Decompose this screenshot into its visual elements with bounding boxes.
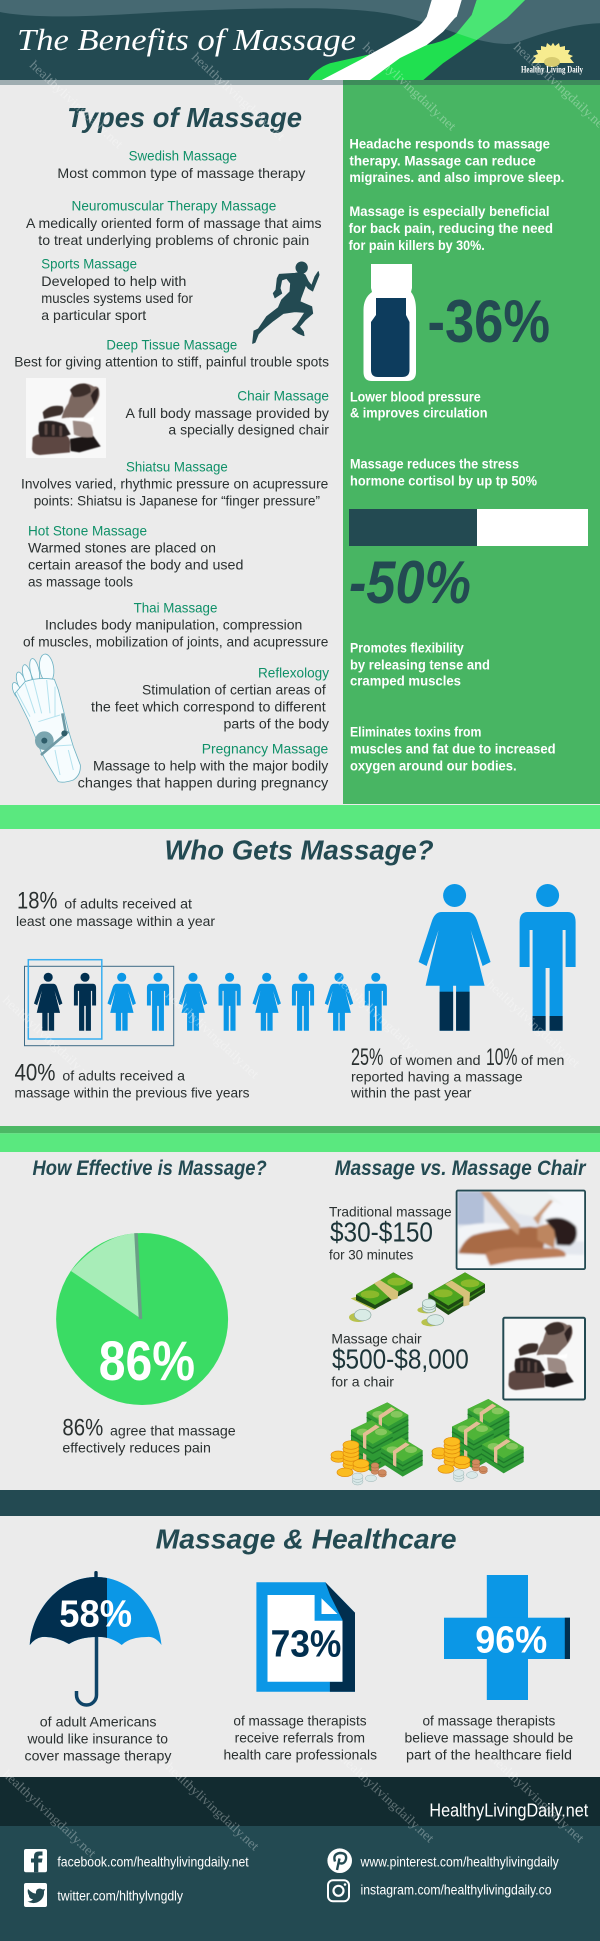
text: 40 percent: massage within the previous five years: [14, 1085, 250, 1101]
item: chair: a specially designed chair: [168, 422, 329, 438]
text: healthylivingdaily.net: [163, 987, 263, 1082]
text: 25 and 10 percent: reported having a massage: [351, 1069, 523, 1085]
item: chair: Chair Massage: [237, 388, 329, 404]
header banner: [0, 0, 600, 85]
text: 18 percent: of adults received at: [64, 896, 192, 912]
social: instagram: instagram.com/healthylivingdaily.co: [360, 1883, 552, 1898]
text: healthylivingdaily.net: [484, 976, 584, 1071]
text: toxins: muscles and fat due to increased: [350, 741, 556, 757]
item: hot stone: Warmed stones are placed on: [28, 540, 216, 556]
panel: benefits (green): [343, 85, 600, 804]
text: chair price: for a chair: [331, 1374, 394, 1390]
item: shiatsu: [21, 459, 329, 509]
icon: runner: [253, 262, 319, 343]
item: reflexology: parts of the body: [224, 716, 329, 732]
text: healthylivingdaily.net: [333, 972, 433, 1067]
text: back pain: Massage is especially beneficial: [349, 203, 550, 219]
panel: who gets massage: [14, 834, 576, 1101]
item: deep tissue: Deep Tissue Massage: [106, 337, 237, 353]
item: neuromuscular: to treat underlying problems of chronic pain: [38, 232, 309, 248]
text: back pain: [349, 203, 553, 253]
item: pregnancy: changes that happen during pregnancy: [78, 775, 328, 791]
text: traditional price: Traditional massage: [329, 1204, 452, 1220]
item: thai: Includes body manipulation, compression: [45, 617, 302, 633]
text: 73 caption: health care professionals: [224, 1747, 377, 1763]
text: 86 percent: [62, 1415, 236, 1456]
social: instagram: [328, 1880, 552, 1901]
icon: medical cross 96 percent: [444, 1575, 570, 1700]
text: flexibility: [350, 640, 490, 689]
item: swedish: Most common type of massage therapy: [57, 165, 305, 181]
stat: 96%: 96%: [475, 1619, 547, 1661]
social: pinterest: www.pinterest.com/healthylivingdaily: [360, 1855, 559, 1870]
image: massage photo: [457, 1191, 585, 1269]
text: toxins: [350, 724, 556, 774]
stat: 58%: 58%: [59, 1594, 132, 1636]
text: healthylivingdaily.net: [360, 39, 460, 134]
item: sports: muscles systems used for: [41, 290, 193, 306]
divider band: [0, 805, 600, 829]
icon: umbrella 58 percent: [30, 1571, 161, 1705]
text: back pain: for pain killers by 30%.: [349, 237, 485, 253]
item: reflexology: the feet which correspond to different: [91, 699, 326, 715]
stat: -50%: -50%: [349, 549, 471, 616]
heading: massage and healthcare: Massage & Healthcare: [156, 1524, 456, 1555]
panel: massage vs chair: [329, 1157, 587, 1485]
text: flexibility: cramped muscles: [350, 673, 461, 689]
pictogram row: ten people: [24, 960, 387, 1046]
text: 73 caption: receive referrals from: [235, 1730, 365, 1746]
social: twitter: [24, 1883, 183, 1907]
text: 86 percent: agree that massage: [110, 1423, 236, 1439]
stat: 73%: 73%: [271, 1624, 341, 1666]
text: headache: therapy. Massage can reduce: [349, 153, 536, 169]
panel: types of massage: [10, 102, 329, 791]
text: chair price: Massage chair: [331, 1331, 422, 1347]
item: hot stone: certain areasof the body and used: [28, 557, 243, 573]
text: 25 and 10 percent: of men: [521, 1052, 564, 1068]
text: 40 percent: 40%: [14, 1060, 56, 1087]
text: 25 and 10 percent: 10%: [486, 1044, 517, 1071]
text: 40 percent: [14, 1060, 250, 1101]
image: chair framed: [503, 1318, 585, 1400]
item: chair: [126, 388, 329, 438]
bar: 50 percent: [349, 509, 588, 546]
text: cortisol: Massage reduces the stress: [350, 456, 519, 472]
item: hot stone: as massage tools: [28, 574, 133, 590]
text: chair price: [331, 1331, 469, 1390]
item: sports: a particular sport: [41, 307, 146, 323]
item: reflexology: Stimulation of certian areas of: [142, 682, 326, 698]
text: traditional price: for 30 minutes: [329, 1246, 413, 1262]
item: thai: Thai Massage: [134, 600, 218, 616]
item: deep tissue: [14, 337, 329, 370]
text: 25 and 10 percent: within the past year: [350, 1085, 472, 1101]
item: neuromuscular: Neuromuscular Therapy Massage: [72, 198, 276, 214]
text: 25 and 10 percent: [350, 1044, 564, 1101]
item: thai: of muscles, mobilization of joints, and acupressure: [23, 634, 329, 650]
item: sports: [41, 256, 193, 323]
social: facebook: [24, 1849, 249, 1872]
text: headache: [349, 136, 564, 185]
text: traditional price: $30-$150: [330, 1217, 433, 1248]
item: shiatsu: Shiatsu Massage: [126, 459, 228, 475]
heading: how effective: How Effective is Massage?: [32, 1157, 267, 1180]
icon: document 73 percent: [256, 1582, 355, 1692]
icon: large money piles: [331, 1399, 524, 1485]
text: 96 caption: believe massage should be: [404, 1730, 574, 1746]
text: cortisol: hormone cortisol by up tp 50%: [350, 473, 537, 489]
text: 73 caption: [224, 1713, 377, 1763]
panel: how effective: [32, 1157, 267, 1456]
item: hot stone: [28, 523, 243, 590]
stat: 86%: 86%: [99, 1329, 195, 1392]
text: 58 caption: would like insurance to: [27, 1730, 168, 1746]
pie chart: [56, 1233, 228, 1405]
item: swedish: Swedish Massage: [129, 148, 237, 164]
text: 96 caption: of massage therapists: [422, 1713, 555, 1729]
text: healthylivingdaily.net: [338, 1751, 438, 1846]
item: reflexology: Reflexology: [258, 665, 329, 681]
text: back pain: for back pain, reducing the need: [349, 220, 553, 236]
text: healthylivingdaily.net: [163, 1759, 263, 1854]
title: The Benefits of Massage: [17, 22, 356, 57]
text: 40 percent: of adults received a: [62, 1068, 185, 1084]
icon: large woman: [419, 884, 491, 1031]
item: shiatsu: Involves varied, rhythmic pressure on acupressure: [21, 475, 329, 491]
item: swedish: [57, 148, 305, 181]
item: hot stone: Hot Stone Massage: [28, 523, 147, 539]
icon: small money stacks: [349, 1272, 485, 1326]
text: 25 and 10 percent: of women and: [390, 1052, 481, 1068]
text: 18 percent: [16, 888, 215, 929]
text: 86 percent: effectively reduces pain: [62, 1440, 211, 1456]
text: healthylivingdaily.net: [0, 1766, 100, 1861]
text: flexibility: Promotes flexibility: [350, 640, 464, 656]
social: twitter: twitter.com/hlthylvngdly: [57, 1889, 183, 1904]
text: 73 caption: of massage therapists: [233, 1713, 367, 1729]
text: 86 percent: 86%: [62, 1415, 103, 1442]
text: blood pressure: [350, 389, 488, 421]
item: shiatsu: points: Shiatsu is Japanese for “finger pressure”: [34, 493, 320, 509]
text: 96 caption: [404, 1713, 574, 1763]
social: facebook: facebook.com/healthylivingdaily.net: [57, 1855, 249, 1870]
text: 18 percent: least one massage within a year: [16, 913, 215, 929]
text: 96 caption: part of the healthcare field: [406, 1747, 572, 1763]
heading: types of massage: Types of Massage: [67, 102, 302, 133]
text: healthylivingdaily.net: [0, 992, 100, 1087]
item: neuromuscular: [26, 198, 322, 248]
text: traditional price: [329, 1204, 452, 1262]
item: neuromuscular: A medically oriented form of massage that aims: [26, 215, 322, 231]
text: flexibility: by releasing tense and: [350, 657, 490, 673]
footer: [0, 1777, 600, 1941]
text: headache: Headache responds to massage: [349, 136, 550, 152]
text: 18 percent: 18%: [17, 888, 57, 915]
item: sports: Sports Massage: [41, 256, 137, 272]
text: 58 caption: cover massage therapy: [24, 1747, 171, 1763]
divider band: [0, 1126, 600, 1152]
text: healthylivingdaily.net: [189, 49, 289, 144]
logo: [521, 43, 583, 76]
item: pregnancy: Pregnancy Massage: [202, 741, 328, 757]
item: pregnancy: Massage to help with the major bodily: [93, 758, 328, 774]
text: 25 and 10 percent: 25%: [351, 1044, 383, 1071]
icon: large man: [520, 884, 576, 1031]
text: blood pressure: Lower blood pressure: [350, 389, 481, 405]
heading: who gets massage: Who Gets Massage?: [164, 834, 434, 865]
text: toxins: oxygen around our bodies.: [350, 758, 517, 774]
divider band: [0, 1490, 600, 1516]
image: massage chair: [26, 378, 106, 458]
text: chair price: $500-$8,000: [332, 1343, 469, 1374]
text: blood pressure: & improves circulation: [350, 405, 488, 421]
text: healthylivingdaily.net: [488, 1751, 588, 1846]
text: 58 caption: [24, 1713, 171, 1763]
item: reflexology: [91, 665, 329, 732]
text: cortisol: [350, 456, 537, 489]
text: 58 caption: of adult Americans: [40, 1713, 156, 1729]
text: headache: migraines. and also improve sleep.: [349, 169, 564, 185]
stat: -36%: -36%: [428, 288, 550, 355]
item: pregnancy: [78, 741, 328, 791]
item: chair: A full body massage provided by: [126, 405, 329, 421]
panel: massage and healthcare: [24, 1524, 574, 1763]
item: thai: [23, 600, 329, 650]
item: deep tissue: Best for giving attention to stiff, painful trouble spots: [14, 354, 329, 370]
icon: pill bottle: [364, 264, 416, 381]
text: healthylivingdaily.net: [27, 57, 127, 152]
icon: foot reflexology: [10, 653, 80, 782]
item: sports: Developed to help with: [41, 273, 186, 289]
social: pinterest: [327, 1848, 559, 1873]
text: toxins: Eliminates toxins from: [350, 724, 481, 740]
